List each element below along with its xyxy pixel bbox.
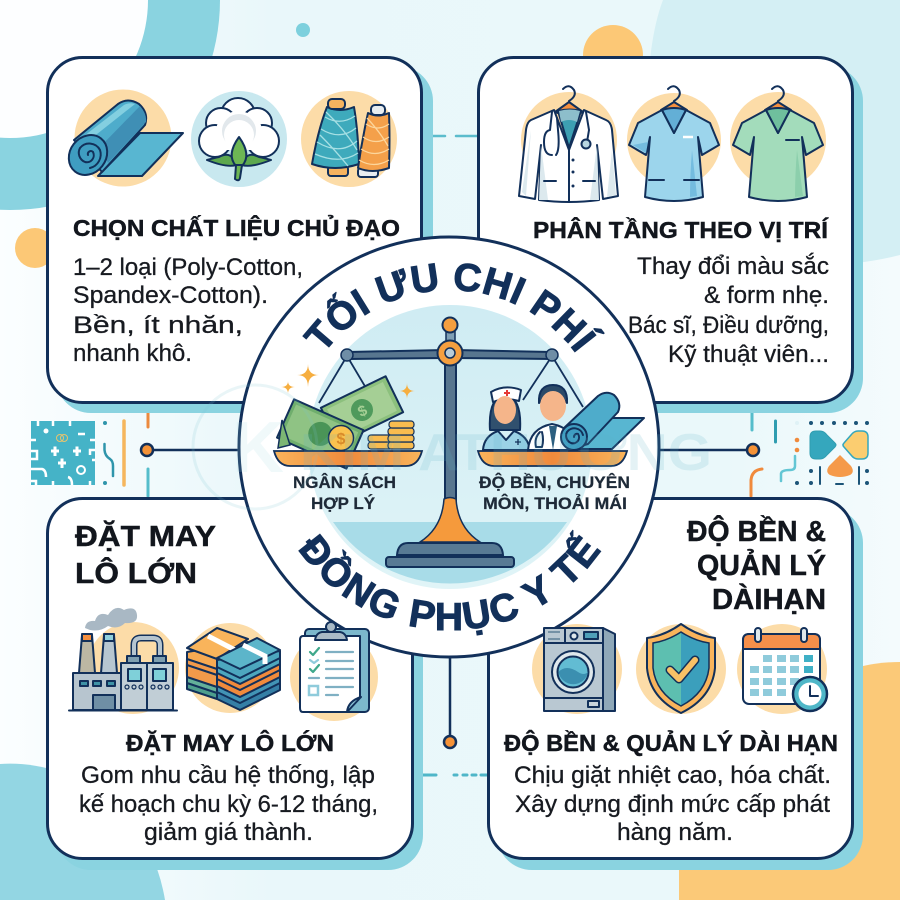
heading: ĐỘ BỀN & QUẢN LÝ DÀI HẠN: [504, 728, 838, 756]
icon: thread spools: [301, 91, 397, 187]
body text: nhanh khô.: [73, 340, 192, 367]
icon: clipboard checklist: [290, 622, 378, 721]
watermark: KIM ATHƯƠNG: [300, 424, 712, 482]
icon: shield: [636, 624, 726, 714]
icon: nurse, doctor and fabric on right pan: [483, 385, 644, 450]
body text: kế hoạch chu kỳ 6-12 tháng,: [79, 791, 378, 818]
node: left: [141, 444, 153, 456]
body text: [514, 762, 831, 846]
panel: phân tầng theo vị trí: [478, 58, 863, 413]
card shadow: [56, 66, 433, 413]
node: bottom: [444, 736, 456, 748]
icon: money and coins on left pan: [277, 364, 415, 469]
heading: PHÂN TẦNG THEO VỊ TRÍ: [533, 216, 829, 243]
icon: blue scrub top: [627, 86, 721, 201]
balance scale: [319, 318, 583, 567]
body text: hàng năm.: [617, 819, 733, 846]
body text: [628, 253, 829, 368]
card body: [478, 58, 852, 402]
body text: Spandex-Cotton).: [73, 282, 268, 309]
big heading: LÔ LỚN: [75, 556, 197, 590]
body text: 1–2 loại (Poly-Cotton,: [73, 254, 303, 281]
scale pans: [274, 451, 627, 466]
icon: fabric stacks: [185, 623, 280, 713]
big heading: ĐẶT MAY: [75, 520, 216, 553]
central medallion: [192, 236, 712, 658]
decoration: right shapes pattern: [776, 421, 869, 485]
body text: Bác sĩ, Điều dưỡng,: [628, 312, 829, 339]
icon: money and coins on left pan: $: [355, 402, 371, 421]
card body: [48, 58, 422, 402]
watermark: [193, 385, 712, 509]
panel: độ bền và quản lý dài hạn: [488, 498, 863, 870]
card body: [488, 498, 852, 858]
node: right: [747, 444, 759, 456]
big heading: [687, 514, 826, 616]
icon: green scrub top: [730, 86, 826, 201]
card shadow: [487, 66, 863, 413]
medallion disc: [239, 237, 659, 657]
big heading: [75, 520, 216, 590]
label: durability: MÔN, THOẢI MÁI: [483, 494, 627, 513]
big heading: ĐỘ BỀN &: [687, 514, 826, 548]
icon: cotton flower: [191, 91, 287, 187]
body text: & form nhẹ.: [704, 282, 829, 309]
label: budget: [293, 473, 396, 513]
body text: Bền, ít nhăn,: [73, 312, 243, 339]
card shadow: [56, 508, 423, 870]
icon: money and coins on left pan: $: [337, 431, 346, 448]
body text: giảm giá thành.: [144, 819, 313, 846]
body text: Chịu giặt nhiệt cao, hóa chất.: [514, 762, 831, 789]
body text: Kỹ thuật viên...: [668, 341, 829, 368]
icon: white lab coat: [519, 86, 618, 202]
icon: calendar with clock: [737, 624, 827, 714]
watermark: K: [232, 408, 284, 488]
panel: đặt may lô lớn: [48, 498, 423, 870]
panel: chọn chất liệu chủ đạo: [48, 58, 433, 413]
body text: Gom nhu cầu hệ thống, lập: [81, 762, 375, 789]
body text: Xây dựng định mức cấp phát: [515, 791, 830, 818]
card shadow: [497, 508, 863, 870]
icon: factory: [69, 608, 179, 714]
body text: [73, 254, 303, 367]
title bottom arc: ĐỒNG PHỤC Y TẾ: [298, 530, 602, 636]
body text: [79, 762, 378, 846]
card body: [48, 498, 412, 858]
label: budget: HỢP LÝ: [311, 494, 376, 513]
label: budget: NGÂN SÁCH: [293, 473, 396, 492]
body text: Thay đổi màu sắc: [637, 253, 829, 280]
heading: ĐẶT MAY LÔ LỚN: [126, 729, 334, 756]
icon: washing machine: [532, 624, 622, 714]
label: durability: ĐỘ BỀN, CHUYÊN: [479, 473, 630, 492]
decoration: left circuit pattern: [31, 421, 124, 485]
inner circle backdrop: [308, 305, 592, 589]
label: durability: [479, 473, 630, 513]
connector lines: [148, 136, 762, 775]
big heading: QUẢN LÝ: [697, 548, 826, 582]
heading: CHỌN CHẤT LIỆU CHỦ ĐẠO: [73, 213, 400, 241]
big heading: DÀIHẠN: [712, 582, 826, 616]
title top arc: TỐI ƯU CHI PHÍ: [302, 262, 605, 352]
icon: fabric roll: [61, 90, 183, 186]
